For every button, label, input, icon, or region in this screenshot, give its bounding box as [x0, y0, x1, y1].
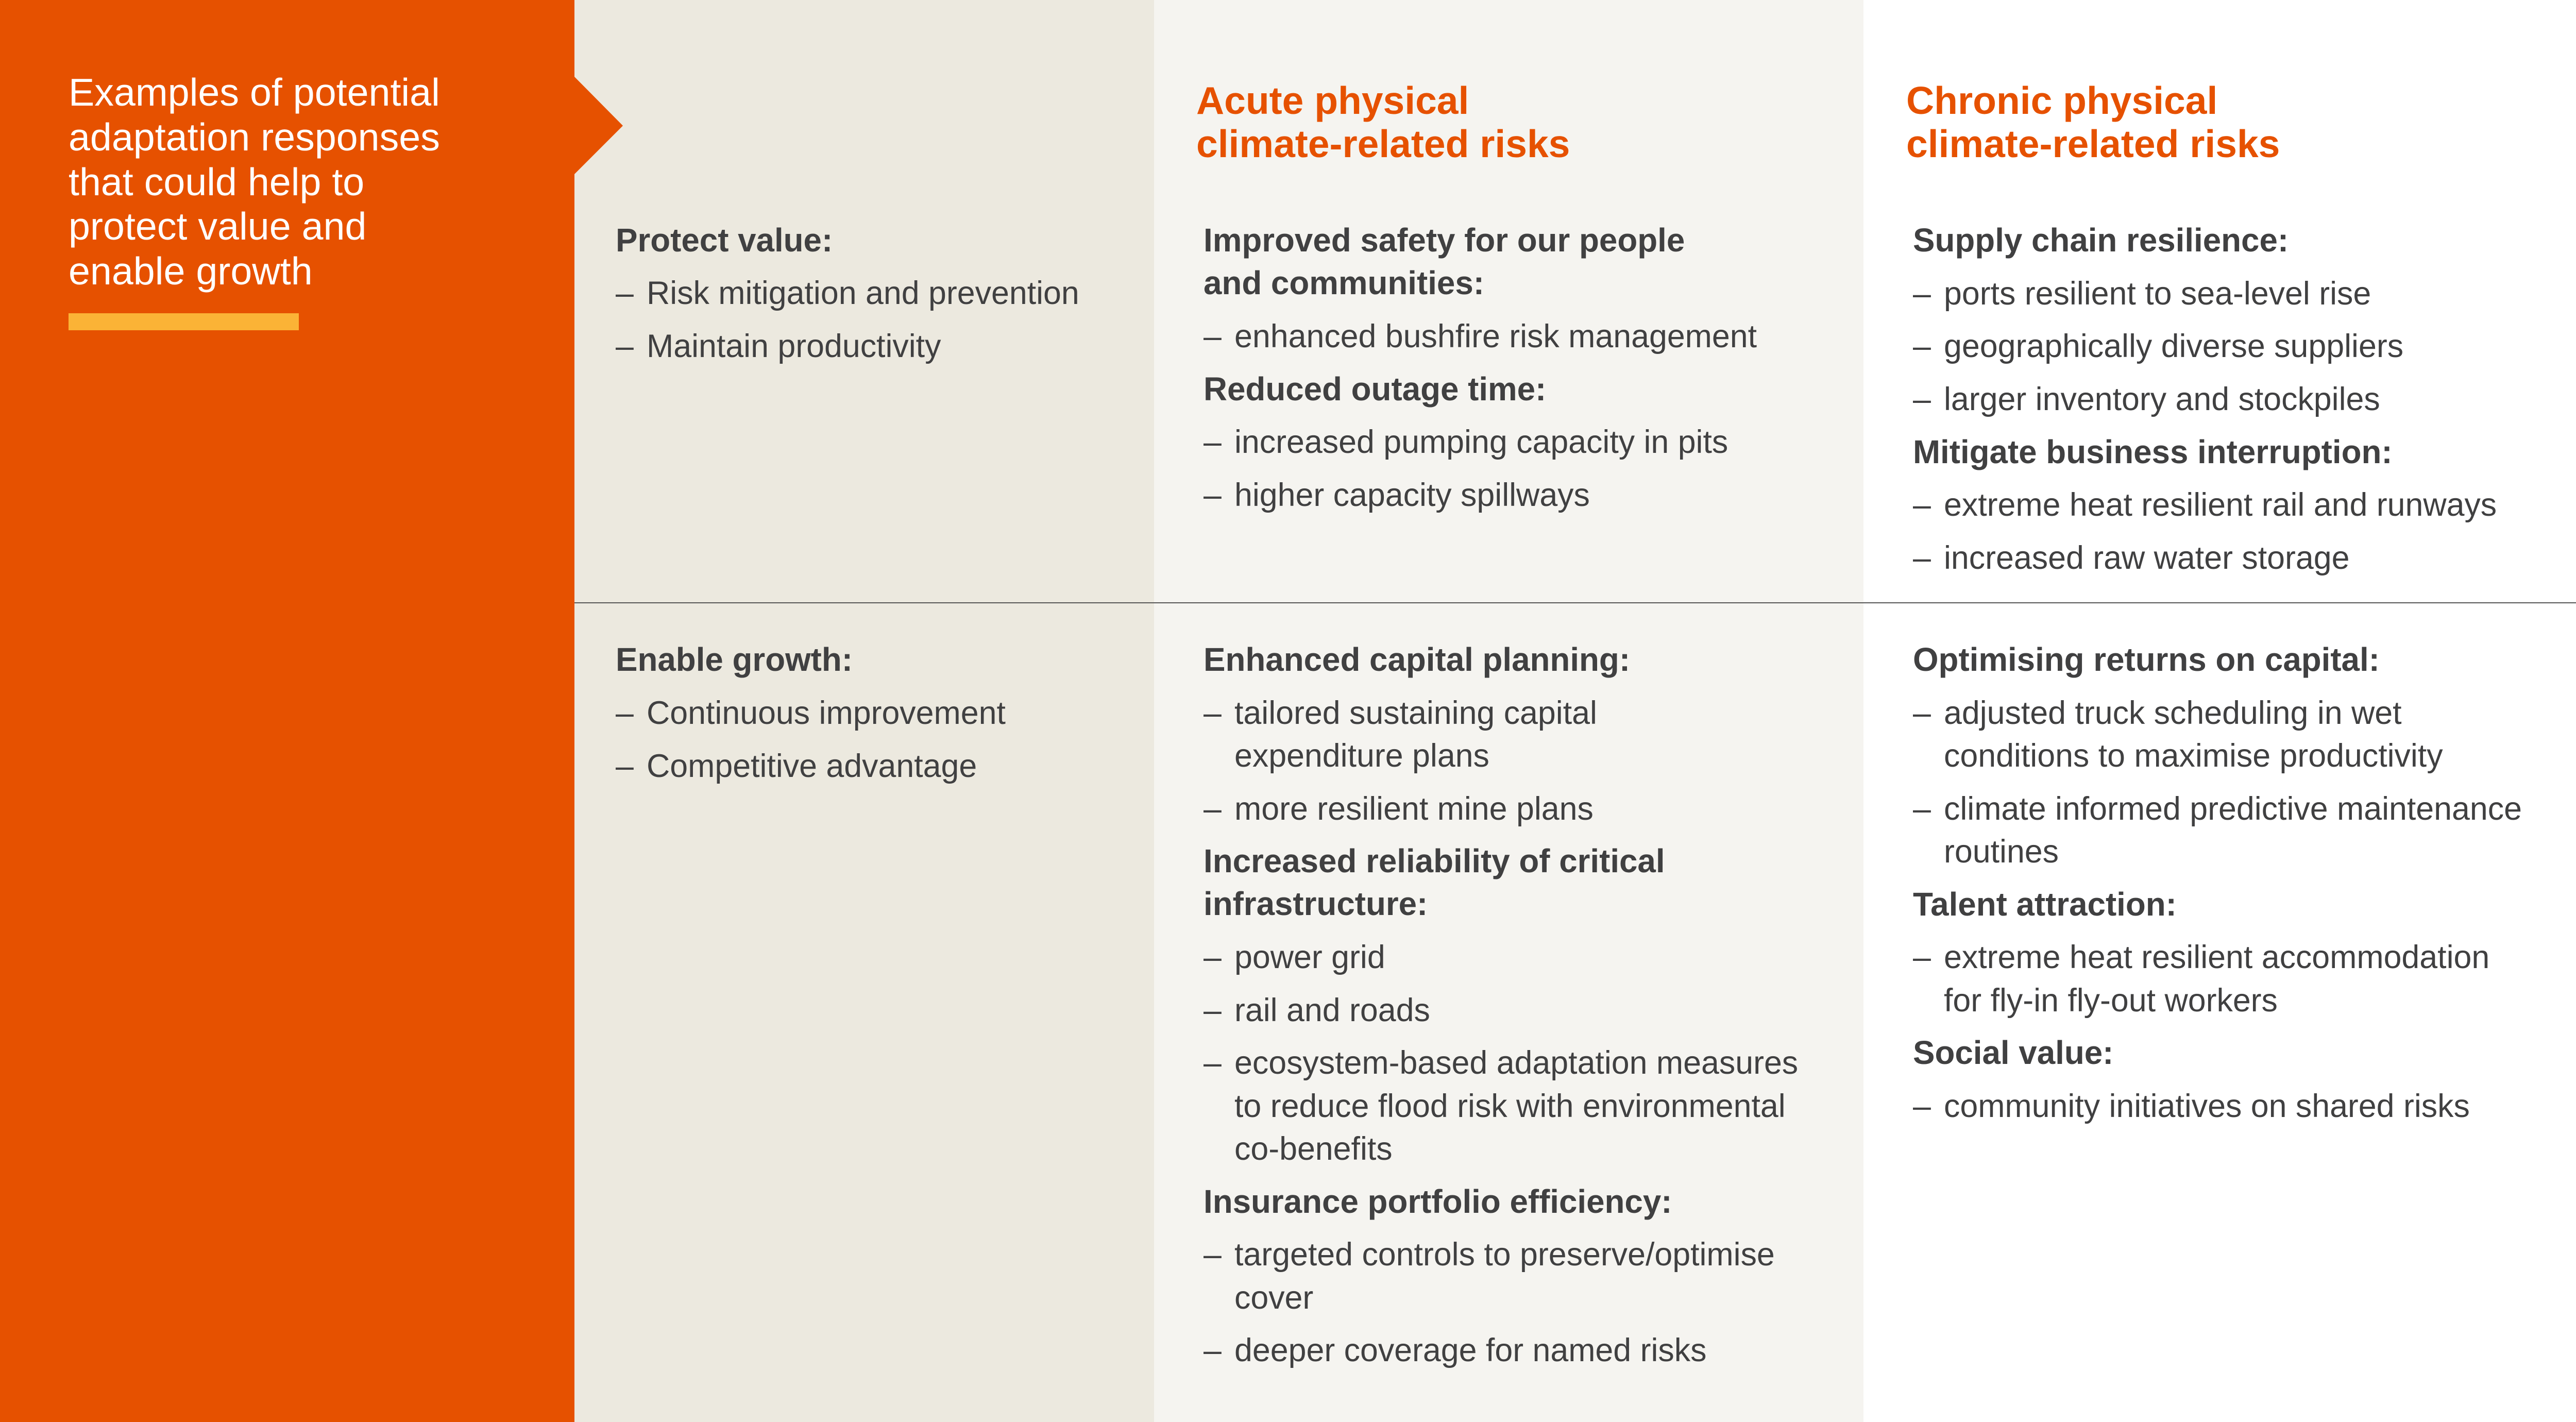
text block: acute enable growth: –	[1204, 1045, 1222, 1081]
panel: acute risks background	[1154, 0, 1863, 1422]
text block: acute protect value: –	[1204, 318, 1222, 354]
text block: acute protect value: enhanced bushfire risk management	[1234, 318, 1757, 354]
text block: acute enable growth: –	[1204, 992, 1222, 1028]
text block: chronic enable growth: –	[1913, 791, 1931, 827]
text block: chronic protect value: ports resilient to sea-level rise	[1944, 276, 2371, 312]
text block: acute protect value: increased pumping capacity in pits	[1234, 424, 1728, 460]
text block: chronic protect value: –	[1913, 276, 1931, 312]
text block: chronic enable growth	[1913, 641, 2522, 1124]
title accent bar	[69, 313, 299, 330]
title: Examples of potential	[69, 71, 440, 114]
text block: acute protect value: Improved safety for our people	[1204, 222, 1685, 259]
text block: chronic protect value: Supply chain resilience:	[1913, 222, 2289, 259]
text block: acute enable growth: Increased reliability of critical	[1204, 843, 1665, 879]
text block: acute protect value	[1204, 222, 1757, 513]
heading: acute risks: climate-related risks	[1196, 122, 1570, 165]
text block: protect value: Protect value:	[616, 222, 833, 259]
text block: acute enable growth: co-benefits	[1234, 1131, 1393, 1167]
text block: acute enable growth	[1204, 641, 1798, 1368]
text block: acute enable growth: to reduce flood risk with environmental	[1234, 1088, 1786, 1124]
text block: enable growth: –	[616, 695, 634, 731]
text block: chronic protect value: –	[1913, 328, 1931, 364]
text block: acute protect value: and communities:	[1204, 265, 1484, 301]
text block: chronic protect value: increased raw water storage	[1944, 540, 2349, 576]
text block: acute enable growth: tailored sustaining capital	[1234, 695, 1597, 731]
text block: chronic protect value: extreme heat resilient rail and runways	[1944, 487, 2497, 523]
text block: acute enable growth: expenditure plans	[1234, 738, 1489, 774]
text block: chronic protect value	[1913, 222, 2497, 576]
text block: acute enable growth: Enhanced capital planning:	[1204, 641, 1630, 678]
text block: chronic protect value: –	[1913, 381, 1931, 417]
text block: acute enable growth: power grid	[1234, 939, 1385, 975]
title	[69, 71, 440, 293]
text block: acute enable growth: ecosystem-based adaptation measures	[1234, 1045, 1798, 1081]
text block: enable growth: Continuous improvement	[647, 695, 1006, 731]
heading: chronic risks	[1906, 79, 2280, 165]
text block: chronic protect value: geographically diverse suppliers	[1944, 328, 2403, 364]
text block: acute enable growth: –	[1204, 791, 1222, 827]
panel: chronic risks background	[1863, 0, 2576, 1422]
text block: chronic enable growth: conditions to maximise productivity	[1944, 738, 2443, 774]
text block: acute protect value: –	[1204, 477, 1222, 513]
text block: protect value: Maintain productivity	[647, 328, 941, 364]
text block: enable growth: Competitive advantage	[647, 748, 977, 784]
text block: chronic enable growth: adjusted truck scheduling in wet	[1944, 695, 2402, 731]
heading: chronic risks: climate-related risks	[1906, 122, 2280, 165]
text block: acute enable growth: deeper coverage for named risks	[1234, 1332, 1706, 1368]
text block: enable growth: –	[616, 748, 634, 784]
text block: acute protect value: Reduced outage time:	[1204, 371, 1546, 408]
text block: chronic enable growth: for fly-in fly-out workers	[1944, 983, 2278, 1019]
text block: chronic enable growth: extreme heat resilient accommodation	[1944, 939, 2489, 975]
text block: acute enable growth: –	[1204, 695, 1222, 731]
text block: chronic enable growth: routines	[1944, 834, 2059, 870]
text block: acute enable growth: rail and roads	[1234, 992, 1430, 1028]
divider line	[574, 602, 2576, 603]
title: protect value and	[69, 205, 366, 248]
title: adaptation responses	[69, 115, 440, 159]
text block: acute protect value: –	[1204, 424, 1222, 460]
text block: protect value: –	[616, 328, 634, 364]
title: enable growth	[69, 249, 313, 293]
text block: chronic enable growth: Optimising returns on capital:	[1913, 641, 2380, 678]
text block: acute protect value: higher capacity spillways	[1234, 477, 1590, 513]
text block: chronic enable growth: climate informed predictive maintenance	[1944, 791, 2522, 827]
text block: acute enable growth: Insurance portfolio efficiency:	[1204, 1183, 1672, 1220]
panel: orange sidebar with arrow	[0, 0, 623, 1422]
heading: acute risks: Acute physical	[1196, 79, 1469, 122]
text block: acute enable growth: –	[1204, 1237, 1222, 1273]
text block: acute enable growth: infrastructure:	[1204, 886, 1428, 922]
text block: acute enable growth: more resilient mine plans	[1234, 791, 1594, 827]
text block: acute enable growth: cover	[1234, 1280, 1313, 1316]
text block: protect value	[616, 222, 1079, 364]
text block: enable growth	[616, 641, 1006, 784]
text block: protect value: –	[616, 275, 634, 311]
text block: chronic protect value: Mitigate business interruption:	[1913, 434, 2393, 470]
heading: acute risks	[1196, 79, 1570, 165]
text block: chronic protect value: –	[1913, 540, 1931, 576]
text block: acute enable growth: –	[1204, 1332, 1222, 1368]
text block: acute enable growth: targeted controls to preserve/optimise	[1234, 1237, 1775, 1273]
heading: chronic risks: Chronic physical	[1906, 79, 2217, 122]
text block: chronic protect value: –	[1913, 487, 1931, 523]
text block: chronic enable growth: Talent attraction:	[1913, 886, 2177, 923]
text block: enable growth: Enable growth:	[616, 641, 853, 678]
text block: acute enable growth: –	[1204, 939, 1222, 975]
text block: protect value: Risk mitigation and prevention	[647, 275, 1079, 311]
panel: column one background	[574, 0, 1154, 1422]
title: that could help to	[69, 160, 364, 204]
text block: chronic enable growth: community initiatives on shared risks	[1944, 1088, 2470, 1124]
text block: chronic enable growth: –	[1913, 695, 1931, 731]
text block: chronic enable growth: –	[1913, 1088, 1931, 1124]
text block: chronic enable growth: –	[1913, 939, 1931, 975]
text block: chronic enable growth: Social value:	[1913, 1035, 2113, 1071]
text block: chronic protect value: larger inventory and stockpiles	[1944, 381, 2380, 417]
